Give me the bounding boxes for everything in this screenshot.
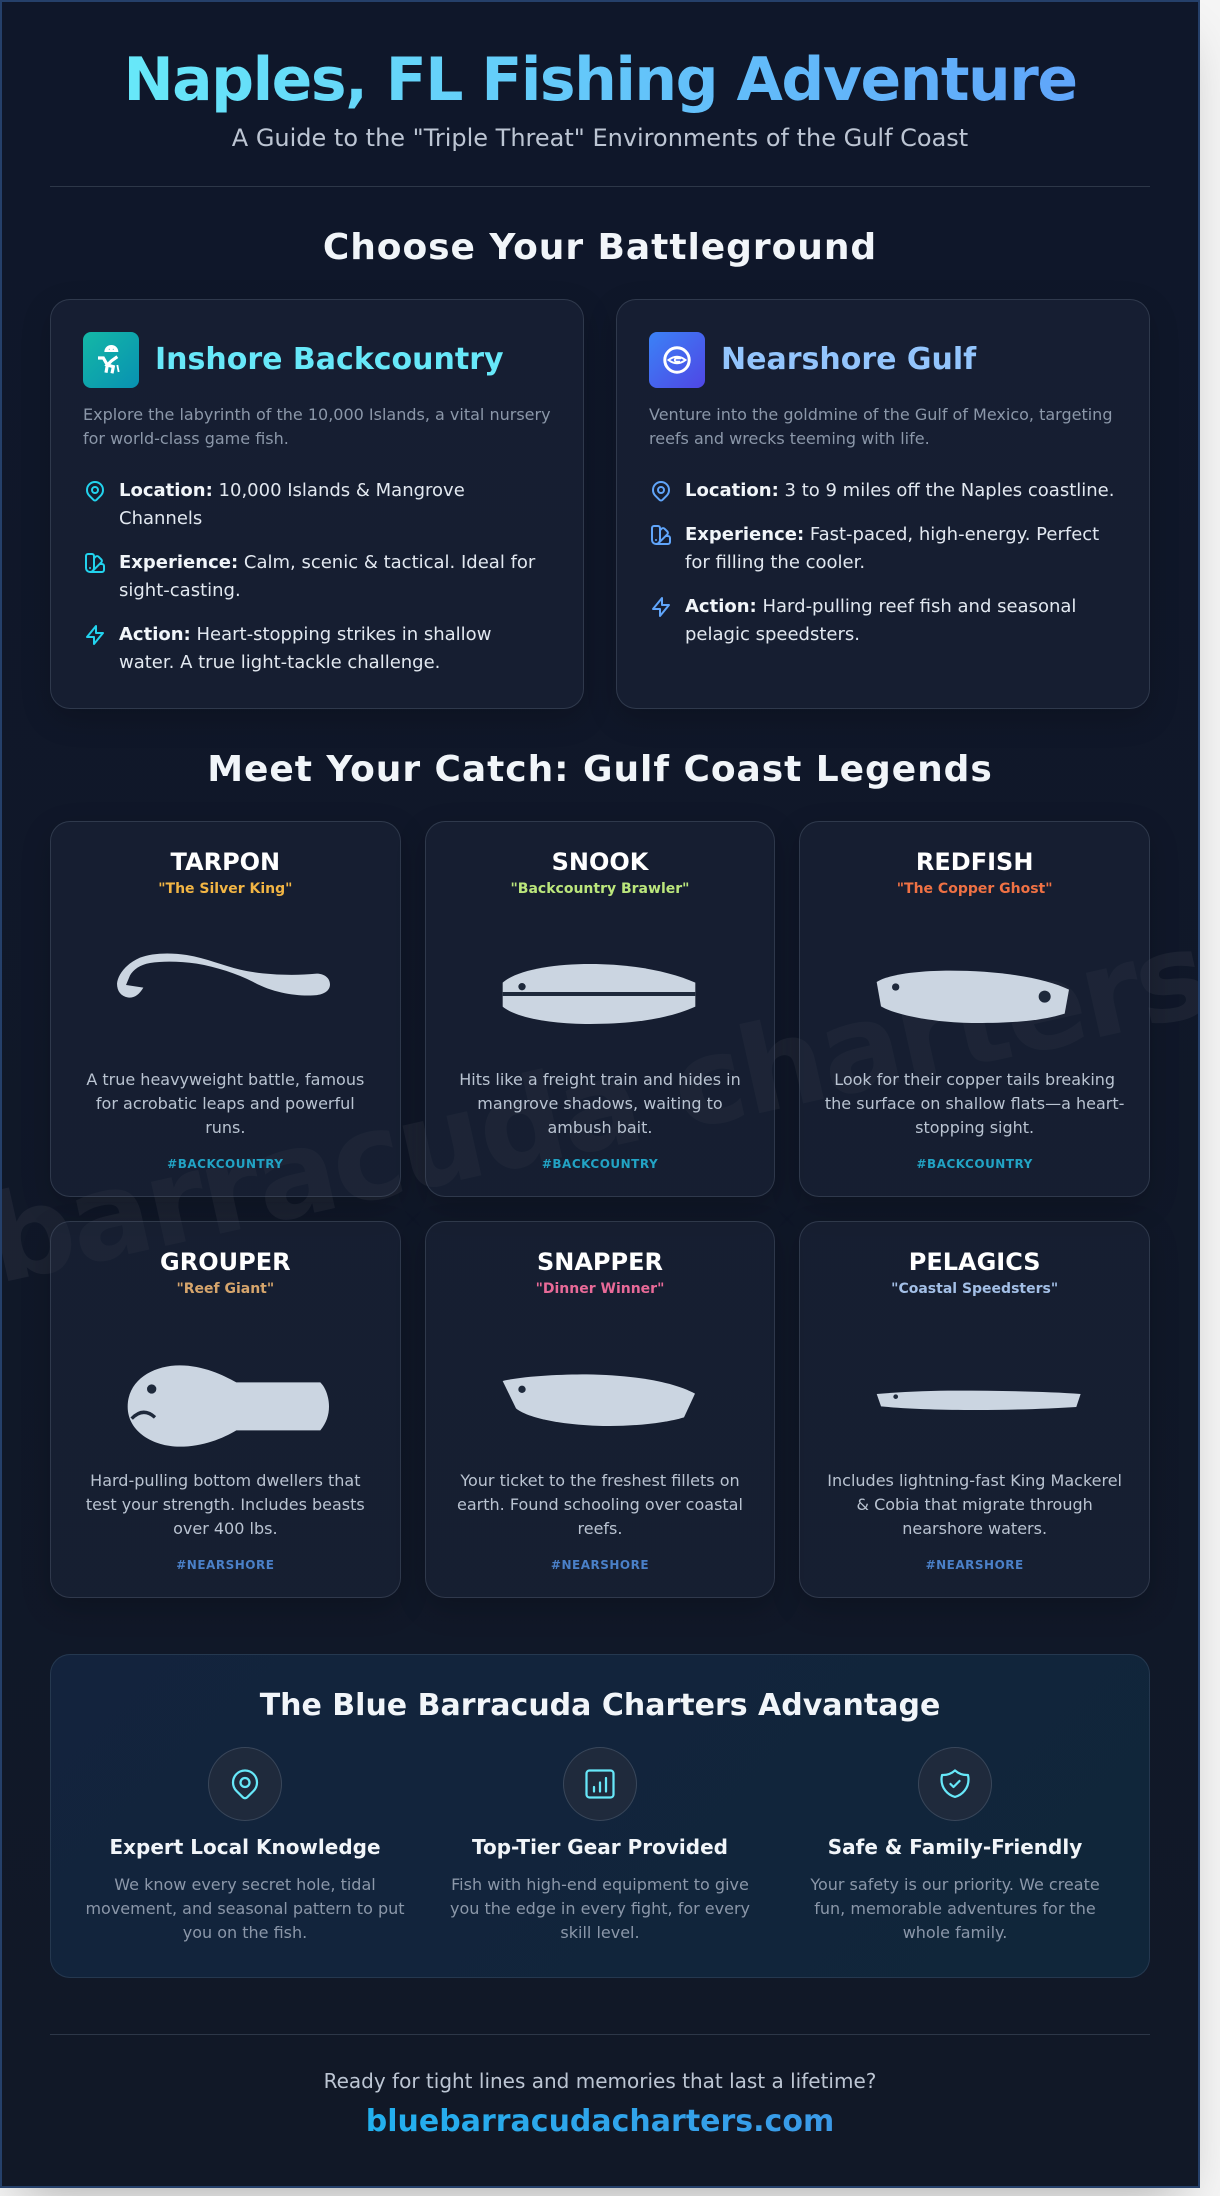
icon: pelagic silhouette bbox=[876, 1390, 1081, 1410]
card: snapper bbox=[425, 1221, 775, 1598]
panel description: reefs and wrecks teeming with life. bbox=[649, 429, 930, 448]
fish description: test your strength. Includes beasts bbox=[86, 1494, 365, 1514]
fish description: runs. bbox=[205, 1118, 245, 1136]
item: experience bbox=[651, 524, 1099, 573]
item: action bbox=[86, 624, 491, 673]
panel: advantage bbox=[50, 1654, 1150, 1978]
card: pelagics bbox=[799, 1221, 1150, 1598]
fish name: PELAGICS bbox=[909, 1248, 1041, 1276]
fish description: earth. Found schooling over coastal bbox=[457, 1494, 743, 1514]
fish description: the surface on shallow flats—a heart- bbox=[825, 1094, 1124, 1112]
icon: shield check bbox=[918, 1747, 992, 1821]
column text bbox=[85, 1874, 405, 1942]
column heading: Top-Tier Gear Provided bbox=[472, 1835, 728, 1859]
card: tarpon bbox=[50, 821, 401, 1197]
panel: nearshore gulf bbox=[616, 299, 1150, 709]
icon: snook silhouette bbox=[502, 964, 696, 1024]
column: expert local knowledge bbox=[85, 1747, 405, 1942]
fish name: SNOOK bbox=[552, 848, 648, 876]
fish description: & Cobia that migrate through bbox=[857, 1494, 1093, 1514]
fish description bbox=[86, 1470, 365, 1538]
fish nickname: "Backcountry Brawler" bbox=[511, 881, 689, 897]
column heading: Expert Local Knowledge bbox=[109, 1835, 381, 1859]
panel description bbox=[83, 405, 551, 448]
heading: meet your catch: Meet Your Catch: Gulf Coast Legends bbox=[207, 749, 993, 790]
column text: fun, memorable adventures for the bbox=[814, 1898, 1096, 1918]
tag: #BACKCOUNTRY bbox=[167, 1156, 283, 1170]
column: top-tier gear bbox=[450, 1747, 750, 1942]
tag: #BACKCOUNTRY bbox=[542, 1156, 658, 1170]
item: experience: for filling the cooler. bbox=[685, 552, 865, 573]
fish description: reefs. bbox=[578, 1518, 622, 1538]
fish name: GROUPER bbox=[160, 1248, 291, 1276]
column text: Your safety is our priority. We create bbox=[810, 1874, 1100, 1894]
fish description: Look for their copper tails breaking bbox=[834, 1070, 1115, 1088]
fish description bbox=[86, 1070, 364, 1136]
icon: snapper silhouette bbox=[502, 1374, 695, 1426]
column text: you the edge in every fight, for every bbox=[450, 1898, 750, 1918]
icon: chart square bbox=[563, 1747, 637, 1821]
fish nickname: "The Copper Ghost" bbox=[897, 881, 1053, 897]
panel description bbox=[649, 405, 1112, 448]
fish description: over 400 lbs. bbox=[173, 1518, 278, 1538]
icon: nearshore fish badge bbox=[649, 332, 705, 388]
card: snook bbox=[425, 821, 775, 1197]
tag: #BACKCOUNTRY bbox=[916, 1156, 1033, 1170]
column text: We know every secret hole, tidal bbox=[114, 1874, 376, 1894]
panel description: Venture into the goldmine of the Gulf of Mexico, targeting bbox=[649, 405, 1112, 424]
column text: Fish with high-end equipment to give bbox=[451, 1874, 749, 1894]
fish description: Includes lightning-fast King Mackerel bbox=[827, 1470, 1122, 1490]
item: experience bbox=[85, 552, 536, 601]
fish nickname: "Dinner Winner" bbox=[536, 1281, 664, 1297]
tag: #NEARSHORE bbox=[551, 1558, 649, 1572]
fish description: nearshore waters. bbox=[902, 1518, 1047, 1538]
fish description bbox=[827, 1470, 1122, 1538]
panel description: Explore the labyrinth of the 10,000 Islands, a vital nursery bbox=[83, 405, 551, 424]
fish description: for acrobatic leaps and powerful bbox=[96, 1094, 355, 1112]
item: experience: Experience: Calm, scenic & tactical. Ideal for bbox=[119, 552, 535, 573]
item: location: Location: 10,000 Islands & Mangrove bbox=[119, 480, 465, 501]
footer prompt: Ready for tight lines and memories that last a lifetime? bbox=[324, 2069, 876, 2093]
card: grouper bbox=[50, 1221, 401, 1598]
fish description: Hard-pulling bottom dwellers that bbox=[90, 1470, 360, 1490]
tag: #NEARSHORE bbox=[926, 1558, 1024, 1572]
heading: choose your battleground: Choose Your Battleground bbox=[323, 226, 877, 268]
fish name: TARPON bbox=[170, 848, 280, 876]
item: action bbox=[652, 596, 1076, 645]
item: action: water. A true light-tackle challenge. bbox=[119, 652, 440, 673]
column text: movement, and seasonal pattern to put bbox=[85, 1898, 405, 1918]
panel description: for world-class game fish. bbox=[83, 429, 289, 448]
column text bbox=[810, 1874, 1100, 1942]
item: experience: sight-casting. bbox=[119, 580, 241, 601]
panel: inshore backcountry bbox=[50, 299, 584, 709]
icon: redfish silhouette bbox=[876, 970, 1069, 1023]
fish name: REDFISH bbox=[916, 848, 1033, 876]
icon: map pin bbox=[208, 1747, 282, 1821]
fish name: SNAPPER bbox=[537, 1248, 663, 1276]
fish description: Hits like a freight train and hides in bbox=[459, 1070, 741, 1088]
card: redfish bbox=[799, 821, 1150, 1197]
icon: grouper silhouette bbox=[128, 1365, 329, 1447]
fish description bbox=[457, 1470, 743, 1538]
panel heading: Nearshore Gulf bbox=[721, 342, 976, 377]
item: experience: Experience: Fast-paced, high-energy. Perfect bbox=[685, 524, 1099, 545]
fish nickname: "Coastal Speedsters" bbox=[891, 1281, 1058, 1297]
fish nickname: "Reef Giant" bbox=[176, 1281, 274, 1297]
fish description: Your ticket to the freshest fillets on bbox=[460, 1470, 740, 1490]
title: Naples, FL Fishing Adventure bbox=[123, 45, 1077, 115]
item: location bbox=[86, 480, 465, 529]
fish description: stopping sight. bbox=[915, 1118, 1034, 1136]
column: safe and family-friendly bbox=[810, 1747, 1100, 1942]
column heading: Safe & Family-Friendly bbox=[828, 1835, 1082, 1859]
column text: you on the fish. bbox=[183, 1922, 307, 1942]
column text: skill level. bbox=[560, 1922, 640, 1942]
fish description: ambush bait. bbox=[547, 1118, 652, 1136]
item: location: Location: 3 to 9 miles off the Naples coastline. bbox=[685, 480, 1114, 501]
fish description bbox=[825, 1070, 1124, 1136]
footer website: bluebarracudacharters.com bbox=[366, 2104, 834, 2138]
item: location: Channels bbox=[119, 508, 202, 529]
fish nickname: "The Silver King" bbox=[158, 881, 292, 897]
icon: inshore angler bbox=[83, 332, 139, 388]
fish description bbox=[459, 1070, 741, 1136]
subtitle: A Guide to the "Triple Threat" Environments of the Gulf Coast bbox=[232, 124, 968, 152]
fish description: A true heavyweight battle, famous bbox=[86, 1070, 364, 1088]
tag: #NEARSHORE bbox=[176, 1558, 274, 1572]
fish description: mangrove shadows, waiting to bbox=[477, 1094, 723, 1112]
item: action: Action: Heart-stopping strikes in shallow bbox=[119, 624, 491, 645]
icon: tarpon silhouette bbox=[117, 954, 330, 998]
panel heading: Inshore Backcountry bbox=[155, 342, 504, 377]
item: action: pelagic speedsters. bbox=[685, 624, 860, 645]
advantage heading: The Blue Barracuda Charters Advantage bbox=[260, 1688, 940, 1723]
column text bbox=[450, 1874, 750, 1942]
item: action: Action: Hard-pulling reef fish and seasonal bbox=[685, 596, 1076, 617]
column text: whole family. bbox=[903, 1922, 1007, 1942]
